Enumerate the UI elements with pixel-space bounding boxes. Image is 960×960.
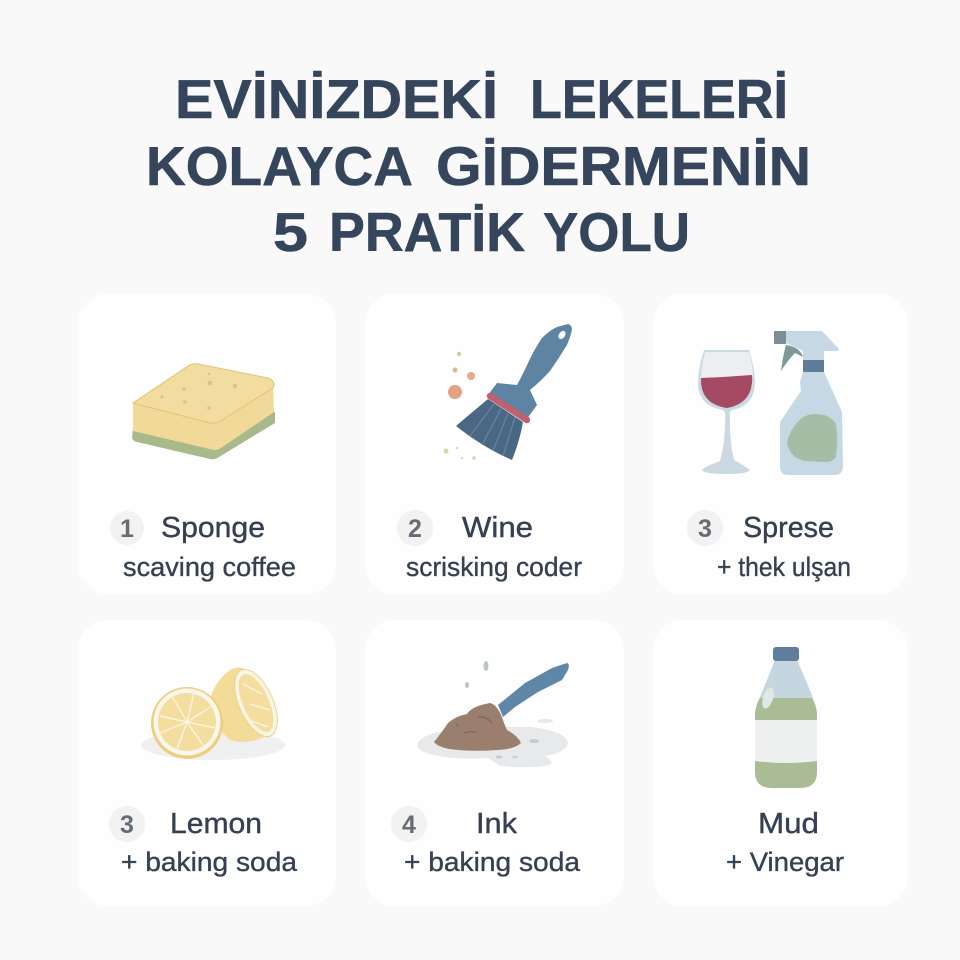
icon: wine glass: [698, 350, 755, 474]
title: 5: [273, 201, 308, 263]
title: [146, 68, 811, 263]
title: GİDERMENİN: [436, 135, 811, 197]
panel: sponge: [78, 294, 336, 594]
text: + baking soda: + baking soda: [121, 847, 298, 877]
number badge 4: 4: [402, 811, 416, 839]
number badge 3: 3: [120, 811, 134, 839]
number badge 1: 1: [120, 515, 134, 543]
text: + baking soda: + baking soda: [404, 847, 581, 877]
title: KOLAYCA: [146, 135, 413, 197]
icon: mud pile with spoon: [417, 661, 569, 767]
icon: brush with specks: [444, 324, 572, 460]
number badge 3: [109, 806, 145, 842]
number badge 1: [110, 511, 144, 545]
number badge 2: 2: [408, 515, 422, 543]
heading: Mud: Mud: [758, 808, 819, 840]
title: PRATİK: [329, 201, 525, 263]
panel: lemon: [78, 620, 336, 906]
icon: vinegar bottle: [755, 647, 817, 788]
text: + thek ulşan: + thek ulşan: [717, 552, 851, 582]
heading: Sprese: Sprese: [743, 512, 834, 544]
panel: mud: [365, 620, 624, 906]
title: EVİNİZDEKİ: [175, 68, 498, 130]
icon: lemon halves: [141, 663, 286, 760]
text: scrisking coder: scrisking coder: [406, 552, 582, 582]
text: scaving coffee: scaving coffee: [123, 552, 296, 582]
number badge 3: [687, 510, 723, 546]
text: + Vinegar: + Vinegar: [726, 847, 844, 877]
heading: Wine: Wine: [462, 512, 533, 544]
title: YOLU: [543, 201, 690, 263]
title: LEKELERİ: [530, 68, 788, 130]
number badge 3: 3: [698, 515, 712, 543]
panel: brush: [365, 294, 624, 594]
number badge 4: [391, 806, 427, 842]
panel: wine and spray: [653, 294, 908, 594]
heading: Sponge: Sponge: [161, 512, 265, 544]
icon: spray bottle: [774, 331, 843, 475]
icon: sponge: [132, 364, 275, 459]
number badge 2: [397, 510, 433, 546]
heading: Ink: Ink: [476, 808, 518, 840]
panel: vinegar: [653, 620, 908, 906]
heading: Lemon: Lemon: [170, 808, 262, 840]
